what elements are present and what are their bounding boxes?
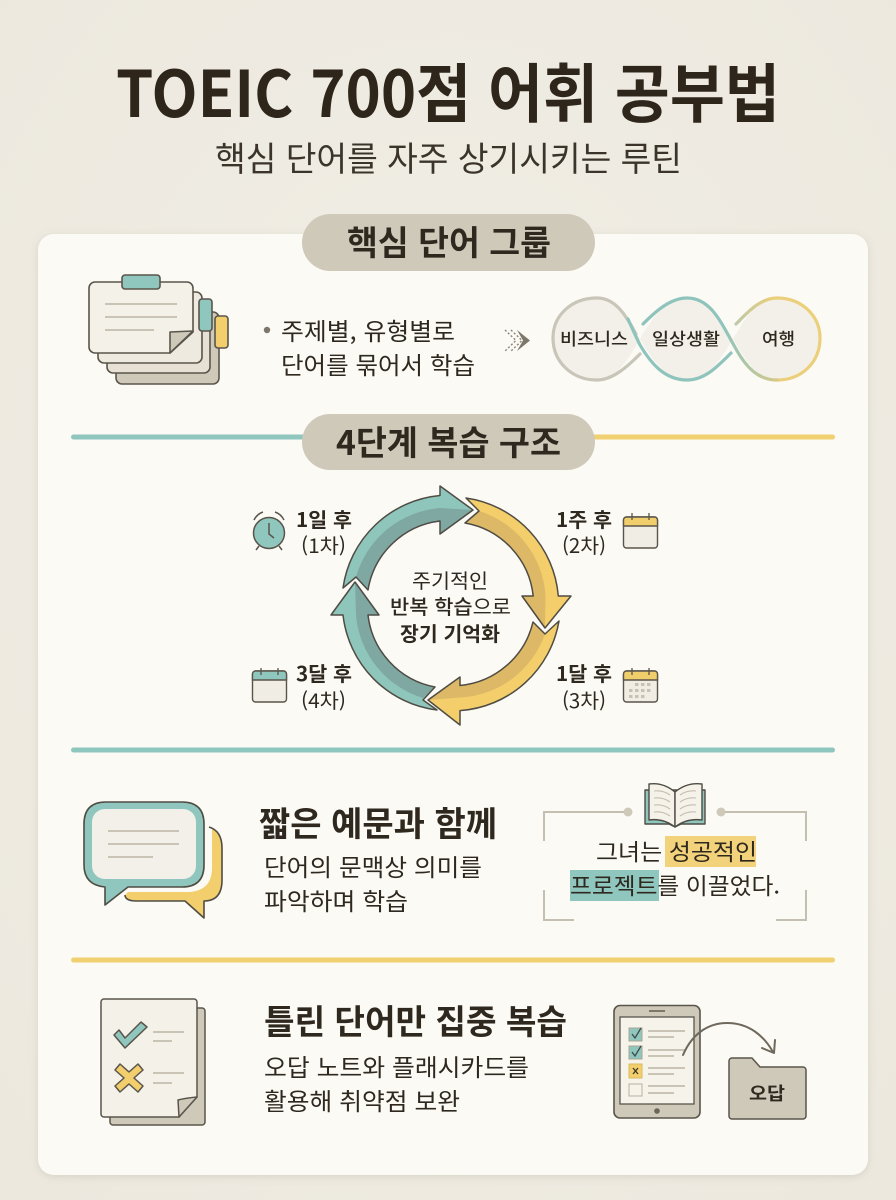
- icon: speech bubbles: [84, 802, 222, 918]
- icon: stacked note sheets: [89, 275, 228, 384]
- step 3 label with calendar: [556, 658, 658, 714]
- diagram: linked topic groups: [553, 298, 820, 380]
- bullet text: grouping method: 주제별, 유형별로: [281, 312, 455, 347]
- body text: [264, 1048, 529, 1117]
- bullet text: grouping method: 단어를 묶어서 학습: [281, 346, 475, 381]
- body text: 파악하며 학습: [264, 882, 408, 917]
- diagram: linked topic groups: 일상생활: [652, 325, 720, 350]
- bullet text: grouping method: [264, 312, 475, 381]
- diagram: linked topic groups: 여행: [762, 325, 795, 350]
- body text: 단어의 문맥상 의미를: [264, 848, 482, 883]
- cycle centre text: 장기 기억화: [400, 618, 500, 647]
- heading pill: four step review: [302, 414, 595, 470]
- step 2 label with calendar: [556, 504, 658, 559]
- arrow: step 1 to 2: [343, 486, 473, 590]
- subtitle: 핵심 단어를 자주 상기시키는 루틴: [215, 132, 682, 181]
- panel: short example sentences: [84, 784, 806, 920]
- body text: [264, 848, 482, 917]
- step 4 label with calendar: [252, 658, 352, 714]
- arrow: step 2 to 3: [465, 498, 571, 628]
- step 4 label with calendar: (4차): [301, 685, 346, 714]
- step 1 label with clock: (1차): [301, 530, 346, 559]
- panel: focused review of wrong words: [101, 995, 806, 1125]
- panel: main card: [38, 234, 868, 1175]
- heading pill: four step review: 4단계 복습 구조: [336, 416, 561, 465]
- cycle centre text: 주기적인: [412, 565, 488, 594]
- body text: 활용해 취약점 보완: [264, 1082, 460, 1117]
- arrow: tablet to folder: [683, 1023, 775, 1055]
- cycle centre text: 반복 학습으로: [390, 591, 511, 620]
- title: TOEIC 700점 어휘 공부법: [116, 44, 780, 136]
- icon: open book: [645, 784, 705, 827]
- heading pill: core word groups: [302, 214, 595, 271]
- example sentence frame: 그녀는 성공적인: [596, 833, 757, 867]
- cycle diagram: [331, 486, 571, 725]
- icon: checked document: [101, 999, 205, 1125]
- step 1 label with clock: 1일 후: [296, 504, 352, 533]
- step 3 label with calendar: (3차): [562, 685, 606, 714]
- icon: wrong answers folder: [729, 1058, 806, 1119]
- arrow: step 4 to 1: [331, 582, 437, 710]
- heading: short example sentences: 짧은 예문과 함께: [259, 797, 497, 846]
- heading: focused review: 틀린 단어만 집중 복습: [264, 995, 567, 1044]
- panel: four step review: [252, 414, 658, 725]
- step 2 label with calendar: (2차): [562, 530, 606, 559]
- example sentence frame: [544, 784, 806, 920]
- arrow: step 3 to 4: [428, 621, 559, 725]
- cycle centre text: [390, 565, 511, 647]
- step 1 label with clock: [254, 504, 352, 559]
- icon: wrong answers folder: 오답: [749, 1080, 785, 1106]
- icon: chevron arrow: [505, 330, 530, 351]
- heading pill: core word groups: 핵심 단어 그룹: [347, 216, 551, 265]
- step 3 label with calendar: 1달 후: [556, 658, 612, 687]
- body text: 오답 노트와 플래시카드를: [264, 1048, 529, 1083]
- example sentence frame: 프로젝트를 이끌었다.: [570, 867, 780, 901]
- step 4 label with calendar: 3달 후: [296, 658, 352, 687]
- icon: tablet checklist: [614, 1006, 700, 1118]
- step 2 label with calendar: 1주 후: [556, 504, 612, 533]
- diagram: linked topic groups: 비즈니스: [560, 325, 628, 350]
- panel: core word groups: [89, 214, 820, 384]
